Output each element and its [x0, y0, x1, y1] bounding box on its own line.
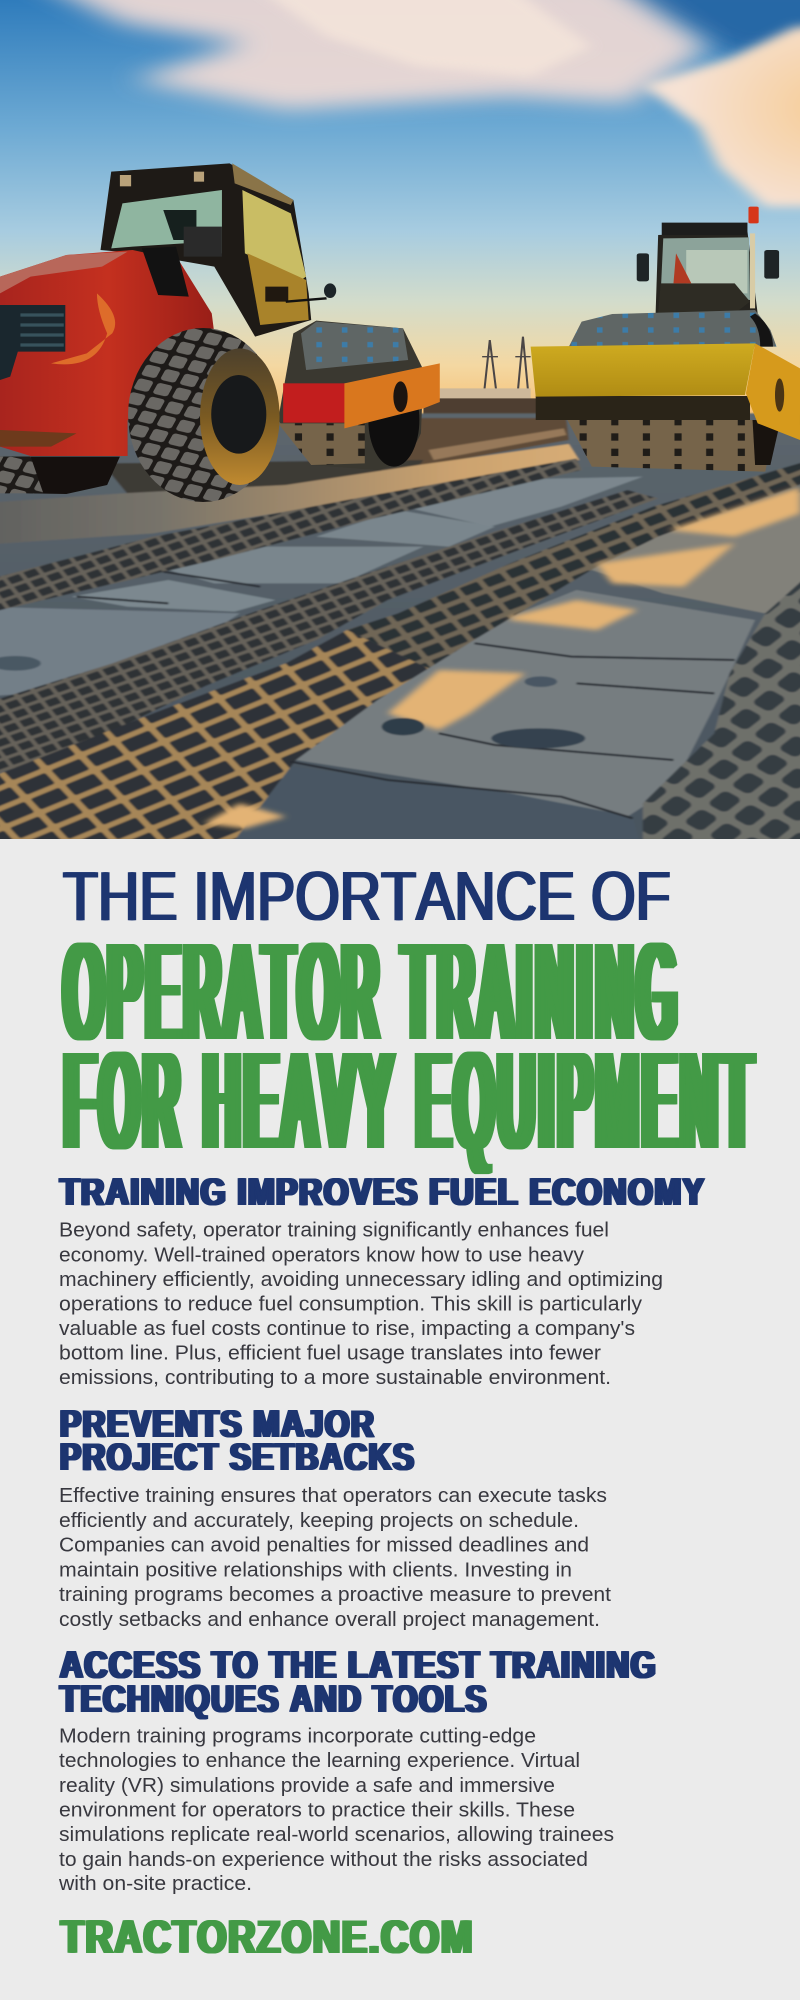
red engine body [0, 250, 240, 456]
text block: training techniques: simulations replicate real-world scenarios, allowing trainees [59, 1824, 614, 1846]
text block: project setbacks: Companies can avoid penalties for missed deadlines and [59, 1534, 589, 1556]
heading: training improves fuel economy: TRAINING IMPROVES FUEL ECONOMY [60, 1171, 706, 1214]
engine grille [0, 305, 65, 380]
text block: project setbacks: costly setbacks and enhance overall project management. [59, 1609, 600, 1631]
left red roller [0, 163, 440, 502]
text block: training techniques [58, 1726, 614, 1895]
clouds [20, 0, 800, 207]
text block: fuel economy: valuable as fuel costs continue to rise, impacting a company's [59, 1318, 635, 1340]
warning beacon [748, 207, 759, 223]
red panel between tire and blade [283, 383, 345, 423]
cab [101, 163, 311, 337]
body underside [0, 420, 128, 456]
text block: training techniques: technologies to enhance the learning experience. Virtual [59, 1750, 580, 1772]
sky [0, 0, 800, 420]
orange blade [344, 363, 440, 428]
cab [637, 207, 779, 313]
heading: techniques and tools: TECHNIQUES AND TOOLS [60, 1678, 488, 1720]
text block: training techniques: Modern training programs incorporate cutting-edge [59, 1726, 536, 1748]
ground with tire tracks [0, 413, 800, 853]
text block: training techniques: reality (VR) simulations provide a safe and immersive [59, 1775, 555, 1797]
text block: project setbacks: training programs becomes a proactive measure to prevent [59, 1584, 611, 1606]
pylons and far ground [423, 337, 561, 420]
hoses [142, 247, 189, 297]
heading: prevents major: PREVENTS MAJOR [60, 1402, 375, 1446]
rear wheel [0, 457, 120, 494]
text block: project setbacks [59, 1485, 611, 1631]
text block: training techniques: with on-site practice. [58, 1873, 252, 1895]
sand plates [0, 477, 800, 817]
text block: fuel economy: bottom line. Plus, efficient fuel usage translates into fewer [59, 1342, 601, 1364]
far ridge [388, 418, 569, 470]
yellow blade [531, 343, 755, 397]
warm sunlight patches [204, 487, 800, 828]
text block: training techniques: to gain hands-on experience without the risks associated [59, 1849, 588, 1871]
title line: for heavy equipment: FOR HEAVY EQUIPMENT [65, 1024, 758, 1178]
right yellow roller [531, 207, 800, 472]
heading: access to the latest training: ACCESS TO THE LATEST TRAINING [60, 1644, 657, 1686]
title line: the importance of: THE IMPORTANCE OF [63, 857, 671, 935]
text block: project setbacks: efficiently and accurately, keeping projects on schedule. [59, 1510, 579, 1532]
large tire [128, 328, 280, 502]
upper part of the main track: fine cells [347, 457, 800, 668]
plate cracks and footprints [77, 572, 735, 818]
upper right deep blue [587, 0, 800, 57]
lower part of the main track: large warm cells [0, 630, 429, 853]
tracks [0, 458, 582, 615]
bottom plate [189, 767, 643, 853]
rear spiked drum [567, 420, 776, 472]
footer website: tractorzone.com: TRACTORZONE.COM [60, 1910, 474, 1963]
text block: fuel economy: economy. Well-trained operators know how to use heavy [59, 1244, 584, 1266]
text block: fuel economy: Beyond safety, operator training significantly enhances fuel [59, 1220, 609, 1242]
shadowed soil under roller [102, 460, 423, 500]
text block: fuel economy: machinery efficiently, avoiding unnecessary idling and optimizing [59, 1269, 663, 1291]
text block: project setbacks: maintain positive relationships with clients. Investing in [59, 1560, 572, 1582]
spiked front drum [278, 321, 423, 470]
heading: project setbacks: PROJECT SETBACKS [60, 1436, 415, 1478]
dark bar under the blade [536, 396, 750, 420]
mirror [286, 298, 327, 302]
lit sand strip [0, 444, 579, 545]
mirrors [637, 253, 649, 281]
text block: fuel economy: operations to reduce fuel consumption. This skill is particularly [59, 1294, 642, 1316]
title line: operator training: OPERATOR TRAINING [65, 915, 681, 1069]
hero photo: rollers on tire-tracked ground at sunset [0, 0, 800, 839]
text block: project setbacks: Effective training ensures that operators can execute tasks [59, 1485, 607, 1507]
front spiked drum [569, 310, 777, 347]
text block: fuel economy [59, 1220, 663, 1389]
text block: fuel economy: emissions, contributing to a more sustainable environment. [59, 1367, 611, 1389]
text block: training techniques: environment for operators to practice their skills. These [59, 1800, 575, 1822]
